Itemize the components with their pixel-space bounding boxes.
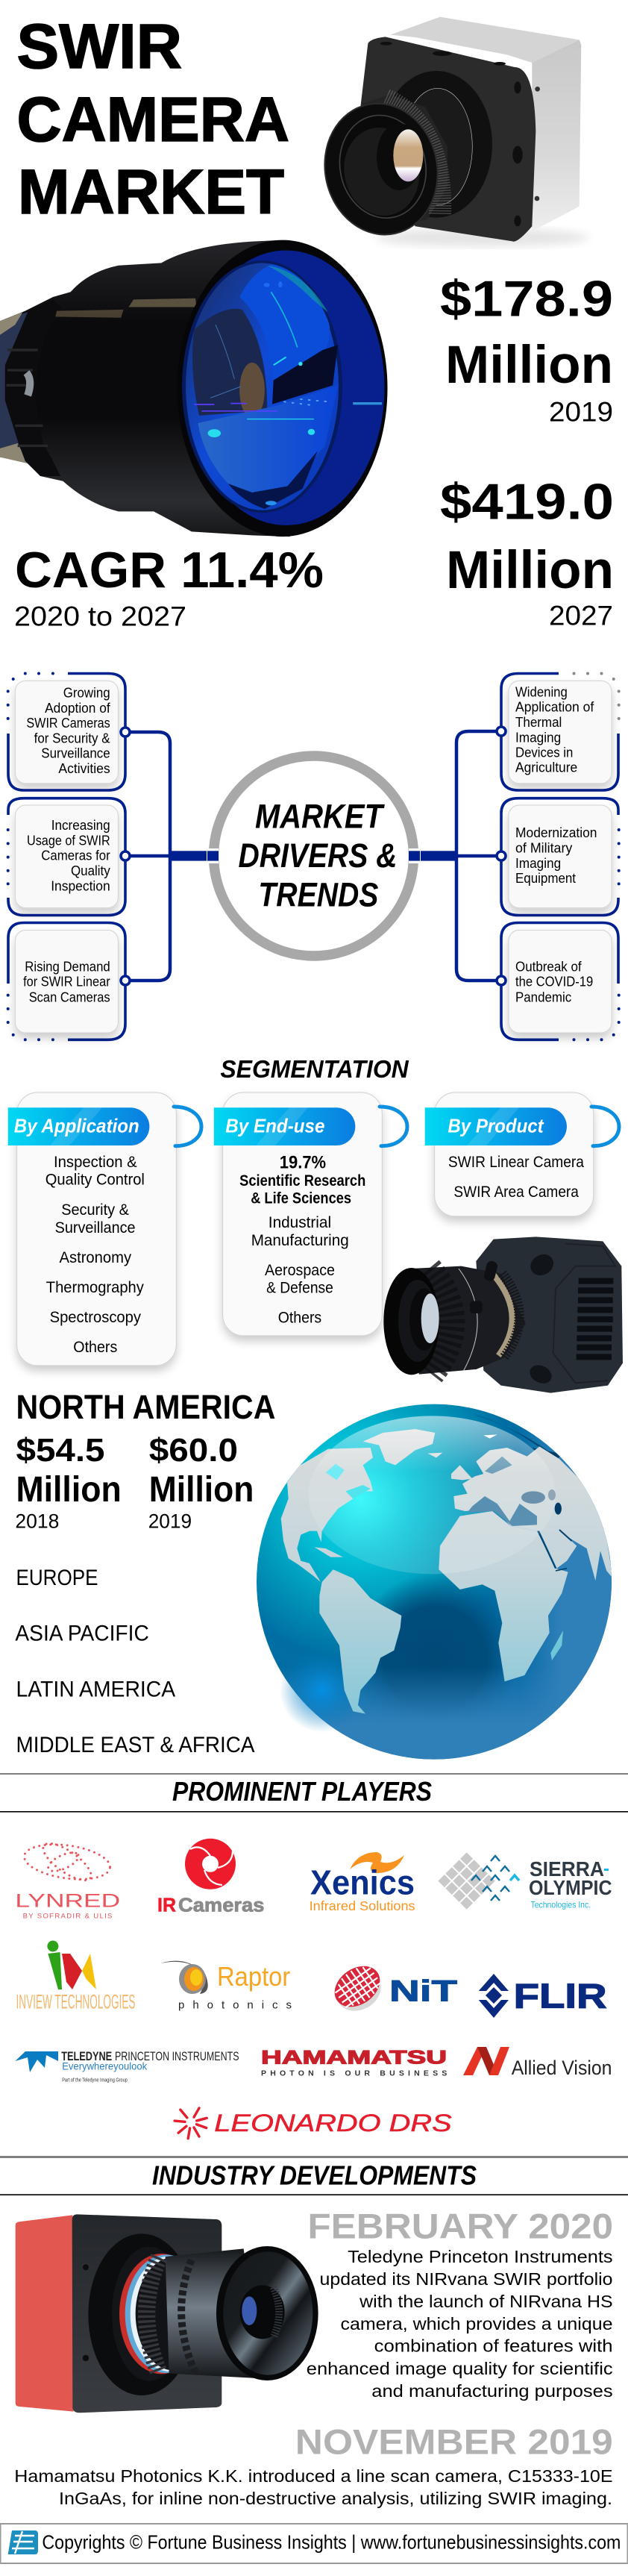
logo: Leonardo DRS xyxy=(175,2108,452,2139)
logo: Allied Vision: Allied Vision xyxy=(512,2057,612,2079)
card: increasing usage xyxy=(7,798,130,915)
footer xyxy=(0,2524,628,2563)
logo: IRCameras xyxy=(157,1839,264,1916)
panel: by end-use: & Defense xyxy=(266,1280,333,1297)
title: MARKET xyxy=(18,157,284,227)
tab xyxy=(214,1107,355,1145)
panel: by application: Inspection & xyxy=(54,1154,137,1171)
logo: Raptor Photonics xyxy=(160,1961,292,2011)
stat: 2019 market size: $178.9 xyxy=(440,270,613,327)
logo: Teledyne Princeton Instruments xyxy=(15,2049,239,2083)
title: CAMERA xyxy=(16,84,289,154)
logo: IRCameras: Cameras xyxy=(178,1893,264,1916)
panel: february 2020 development: with the launch of NIRvana HS xyxy=(359,2292,613,2311)
stat: 2027 market size: $419.0 xyxy=(440,474,614,531)
panel: november 2019 development: NOVEMBER 2019 xyxy=(295,2422,613,2461)
card: growing adoption: Activities xyxy=(58,761,110,776)
card: widening application: Application of xyxy=(515,700,594,715)
panel: company logos xyxy=(15,1837,612,2139)
panel: by application xyxy=(8,1092,201,1366)
stat: 2019 market size: Million xyxy=(445,336,613,395)
stat: 2027 market size: 2027 xyxy=(549,601,613,631)
panel: february 2020 development: enhanced image quality for scientific xyxy=(307,2359,613,2378)
card: increasing usage: Increasing xyxy=(51,818,110,833)
logo: InView xyxy=(16,1940,136,2013)
stat: 2027 market size: Million xyxy=(446,541,614,600)
card: modernization xyxy=(497,798,621,915)
panel: by end-use xyxy=(214,1092,407,1336)
stat: 2019 market size: 2019 xyxy=(549,396,613,427)
card: increasing usage: Cameras for xyxy=(41,848,110,863)
stat: 2018 north america: $54.5 xyxy=(16,1432,104,1469)
title: SWIR xyxy=(16,11,182,81)
panel: february 2020 development: and manufacturing purposes xyxy=(371,2381,613,2401)
panel: regional market sizes: ASIA PACIFIC xyxy=(15,1622,149,1646)
panel: by application: Thermography xyxy=(46,1279,144,1296)
tab: By Product xyxy=(448,1114,544,1137)
image: red camera with lens xyxy=(16,2214,318,2413)
panel: regional market sizes xyxy=(15,1388,275,1757)
panel: by product xyxy=(425,1092,619,1216)
card: rising demand xyxy=(7,922,130,1041)
panel: by application: Quality Control xyxy=(45,1172,145,1189)
panel: november 2019 development xyxy=(14,2422,613,2508)
card: rising demand: Scan Cameras xyxy=(29,990,110,1004)
card: covid outbreak xyxy=(497,922,621,1041)
logo: Sierra-Olympic: Technologies Inc. xyxy=(531,1899,591,1910)
image: dark camera with lens xyxy=(383,1237,623,1393)
central ring xyxy=(207,756,421,956)
logo: Sierra-Olympic: SIERRA xyxy=(530,1857,604,1881)
panel: regional market sizes: NORTH AMERICA xyxy=(16,1388,275,1426)
card: modernization: Modernization xyxy=(515,825,597,840)
card: widening application xyxy=(497,672,621,790)
card: widening application: Devices in xyxy=(515,745,573,760)
stat: 2018 north america: 2018 xyxy=(15,1510,59,1533)
panel: by application: Surveillance xyxy=(55,1219,136,1237)
logo: Teledyne Princeton Instruments: TELEDYNE xyxy=(61,2049,112,2063)
stat: 2027 market size xyxy=(440,474,614,631)
card: widening application: Widening xyxy=(515,684,568,699)
panel: by product: SWIR Linear Camera xyxy=(448,1154,584,1171)
card: covid outbreak: Pandemic xyxy=(515,990,571,1004)
panel: by end-use: Aerospace xyxy=(265,1262,335,1279)
connector: right tree xyxy=(409,731,501,981)
card: growing adoption: for Security & xyxy=(34,731,110,745)
title xyxy=(16,11,289,227)
card: growing adoption: Adoption of xyxy=(45,701,111,716)
stat: 2019 north america: $60.0 xyxy=(149,1432,238,1469)
logo: FLIR: FLIR xyxy=(514,1977,607,2016)
logo: InView: INVIEW TECHNOLOGIES xyxy=(16,1990,136,2013)
central heading: MARKET xyxy=(255,797,385,836)
logo: Hamamatsu: HAMAMATSU xyxy=(261,2048,447,2069)
card: growing adoption: Growing xyxy=(63,686,110,701)
logo: Hamamatsu: PHOTON IS OUR BUSINESS xyxy=(261,2069,447,2078)
logo: Teledyne Princeton Instruments: Part of the Teledyne Imaging Group xyxy=(62,2078,128,2083)
logo: Hamamatsu xyxy=(261,2048,447,2078)
image: globe xyxy=(257,1404,613,1760)
logo: Xenics: Infrared Solutions xyxy=(310,1898,415,1913)
card: increasing usage: Quality xyxy=(71,863,110,878)
card: rising demand: Rising Demand xyxy=(25,960,110,975)
card: increasing usage: Inspection xyxy=(51,878,110,893)
card: modernization: of Military xyxy=(515,840,572,855)
tab xyxy=(8,1107,149,1145)
panel: by application: Security & xyxy=(61,1201,129,1219)
logo: NiT xyxy=(327,1957,457,2019)
heading: prominent players: PROMINENT PLAYERS xyxy=(172,1776,432,1807)
central heading: TRENDS xyxy=(258,875,378,913)
panel: february 2020 development: combination of features with xyxy=(374,2336,613,2356)
stat: CAGR: CAGR 11.4% xyxy=(15,542,324,598)
panel: regional market sizes: LATIN AMERICA xyxy=(16,1677,175,1701)
panel: february 2020 development: updated its NIRvana SWIR portfolio xyxy=(319,2269,613,2289)
stat: 2019 market size xyxy=(440,270,613,427)
panel: by application: Astronomy xyxy=(60,1249,132,1266)
heading: segmentation: SEGMENTATION xyxy=(220,1055,409,1083)
logo: Teledyne Princeton Instruments: Everywhereyoulook xyxy=(62,2060,148,2072)
tab: By End-use xyxy=(225,1114,325,1137)
panel: february 2020 development: FEBRUARY 2020 xyxy=(307,2207,613,2246)
panel: regional market sizes: MIDDLE EAST & AFRICA xyxy=(16,1733,255,1757)
heading: industry developments xyxy=(0,2156,628,2195)
panel: february 2020 development xyxy=(307,2207,613,2401)
card: modernization: Equipment xyxy=(515,871,576,886)
panel: by end-use: Scientific Research xyxy=(239,1172,365,1189)
card: widening application: Thermal xyxy=(515,715,562,730)
panel: by application: Others xyxy=(73,1339,117,1356)
card: covid outbreak: the COVID-19 xyxy=(515,975,593,990)
card: growing adoption: SWIR Cameras xyxy=(26,716,110,731)
tab xyxy=(425,1107,567,1145)
logo: Xenics xyxy=(310,1852,415,1913)
icon: Fortune Business Insights logo xyxy=(8,2530,38,2554)
stat: 2018 north america xyxy=(15,1432,122,1533)
panel: by end-use: Industrial xyxy=(269,1214,331,1231)
panel: february 2020 development: Teledyne Princeton Instruments xyxy=(348,2247,613,2266)
card: widening application: Agriculture xyxy=(515,760,577,775)
card: growing adoption: Surveillance xyxy=(41,746,110,761)
logo: Teledyne Princeton Instruments: PRINCETON INSTRUMENTS xyxy=(115,2049,239,2063)
stat: 2018 north america: Million xyxy=(16,1470,122,1510)
central heading: DRIVERS & xyxy=(239,837,397,875)
card: widening application: Imaging xyxy=(515,730,561,745)
card: growing adoption xyxy=(7,672,130,790)
stat: 2019 north america: Million xyxy=(149,1470,254,1510)
logo: Allied Vision xyxy=(463,2047,612,2079)
connector: left tree xyxy=(125,732,219,981)
panel: by end-use: Manufacturing xyxy=(251,1232,349,1249)
logo: Xenics: Xenics xyxy=(310,1863,415,1901)
central heading xyxy=(239,797,397,913)
stat: 2019 north america: 2019 xyxy=(148,1510,192,1533)
panel: november 2019 development: Hamamatsu Photonics K.K. introduced a line scan camera, C15333-10E xyxy=(14,2466,613,2486)
panel: market drivers and trends xyxy=(7,672,621,1041)
image: industrial camera with silver body xyxy=(313,17,589,247)
panel: february 2020 development: camera, which provides a unique xyxy=(340,2314,613,2333)
logo: FLIR xyxy=(479,1974,607,2018)
card: covid outbreak: Outbreak of xyxy=(515,960,583,975)
panel: november 2019 development: InGaAs, for inline non-destructive analysis, utilizing SWIR imaging. xyxy=(59,2489,612,2508)
panel: by product: SWIR Area Camera xyxy=(453,1184,579,1201)
image: large lens with blue glass xyxy=(0,240,388,537)
logo: Lynred: BY SOFRADIR & ULIS xyxy=(23,1913,112,1921)
stat: CAGR xyxy=(14,542,324,632)
panel: by end-use: & Life Sciences xyxy=(251,1190,351,1207)
stat: 2019 north america xyxy=(148,1432,254,1533)
heading: industry developments: INDUSTRY DEVELOPMENTS xyxy=(152,2160,477,2191)
logo: IRCameras: IR xyxy=(157,1893,176,1916)
card: increasing usage: Usage of SWIR xyxy=(27,833,110,848)
panel: by end-use: Others xyxy=(278,1310,321,1327)
logo: Lynred xyxy=(15,1837,120,1921)
panel: by end-use: 19.7% xyxy=(280,1152,326,1172)
logo: Raptor Photonics: Raptor xyxy=(217,1961,290,1992)
logo: NiT: NiT xyxy=(389,1975,457,2007)
logo: Lynred: LYNRED xyxy=(15,1891,120,1912)
logo: Leonardo DRS: LEONARDO DRS xyxy=(214,2110,452,2136)
logo: Sierra-Olympic xyxy=(438,1852,612,1910)
logo: Sierra-Olympic: OLYMPIC xyxy=(529,1876,612,1899)
stat: CAGR: 2020 to 2027 xyxy=(14,601,186,632)
tab: By Application xyxy=(14,1114,139,1137)
panel: regional market sizes: EUROPE xyxy=(16,1566,98,1590)
card: modernization: Imaging xyxy=(515,856,561,871)
card: rising demand: for SWIR Linear xyxy=(23,975,110,990)
panel: by application: Spectroscopy xyxy=(50,1309,141,1326)
logo: Raptor Photonics: photonics xyxy=(178,1998,292,2011)
